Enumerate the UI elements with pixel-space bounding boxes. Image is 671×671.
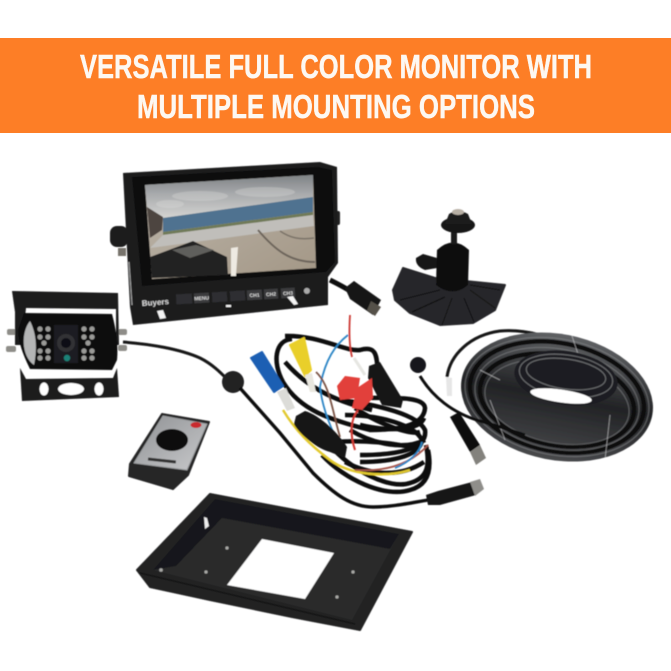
mount disc base — [393, 268, 505, 325]
camera lower bracket — [20, 368, 119, 401]
monitor control buttons: CH3 — [283, 291, 293, 297]
tray window opening — [227, 539, 334, 599]
coil lead cable and connectors — [410, 357, 525, 465]
bracket slots — [157, 296, 298, 319]
harness black cable loops — [277, 336, 429, 492]
black molded junction — [294, 411, 347, 458]
brand logo: Buyers — [142, 297, 170, 308]
monitor control buttons: CH1 — [249, 293, 260, 299]
remote red button — [190, 422, 202, 428]
red fuse holder — [337, 376, 373, 410]
product: suction mount — [393, 209, 505, 325]
monitor control buttons — [176, 287, 310, 304]
monitor control buttons: MENU — [194, 295, 210, 302]
monitor screen image — [145, 175, 316, 279]
camera upper bracket — [12, 291, 119, 345]
product: monitor — [110, 162, 381, 325]
coil wraps — [464, 336, 650, 458]
camera cable with grommet and connector — [123, 342, 484, 507]
monitor control buttons: CH2 — [266, 292, 276, 298]
camera mounting bolts — [6, 329, 127, 352]
product: rear camera — [6, 291, 127, 401]
infrared LEDs — [37, 326, 95, 361]
product: flush mount tray — [137, 494, 412, 630]
blue plug — [251, 352, 283, 392]
thin red, blue, brown and yellow wires — [283, 315, 428, 474]
black inline box — [368, 362, 403, 408]
remote directional pad — [156, 429, 188, 451]
banner: orange heading band — [0, 38, 671, 133]
product: wiring harness — [251, 315, 429, 492]
title: MULTIPLE MOUNTING OPTIONS — [137, 88, 535, 125]
side mounting knob — [110, 211, 340, 256]
yellow video plug — [290, 338, 311, 376]
mount ball head — [441, 217, 475, 233]
product: extension cable coil — [409, 328, 654, 466]
title — [80, 48, 592, 125]
camera lens — [57, 334, 75, 361]
product: remote control — [129, 414, 209, 489]
camera body — [18, 313, 117, 370]
monitor video connector — [345, 281, 381, 316]
tray screw holes — [159, 517, 355, 599]
